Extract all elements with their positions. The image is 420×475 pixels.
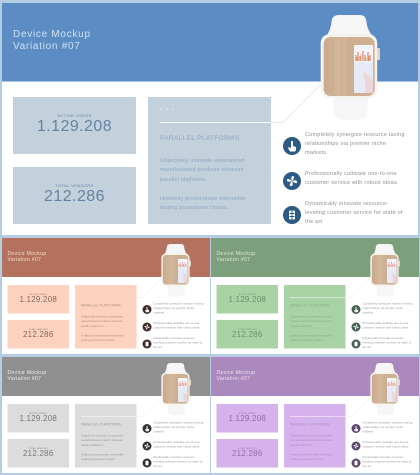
paragraph one	[290, 434, 332, 447]
panel: parallel platforms	[148, 97, 271, 224]
watch mockup with leader line	[136, 363, 191, 417]
paragraph one	[81, 434, 123, 446]
watch mockup with leader line	[136, 244, 191, 298]
text: benefit two: Professionally cultivate one-to-one	[305, 171, 397, 177]
stat: total vendors	[8, 320, 69, 348]
panel: parallel platforms	[284, 404, 345, 467]
paragraph two: testing procedures chains.	[290, 457, 324, 460]
title: Variation #07	[216, 257, 250, 263]
text: benefit three: Dynamically innovate resource-	[305, 201, 388, 207]
paragraph one	[160, 158, 244, 183]
icon: hand	[352, 305, 360, 314]
watch mockup with leader line	[271, 15, 380, 123]
text: benefit two	[305, 171, 399, 186]
icon: hand	[142, 305, 152, 314]
title: Device Mockup	[216, 251, 255, 256]
stat label: ACTIVE USERS	[30, 412, 47, 414]
paragraph one: Objectively innovate empowered	[81, 316, 123, 318]
paragraph two: Holisticly predominate extensible	[81, 453, 124, 456]
stat label: TOTAL VENDORS	[55, 182, 94, 188]
stat value: 212.286	[232, 449, 262, 457]
header band	[210, 238, 418, 277]
stat: active users	[8, 285, 69, 314]
panel heading: PARALLEL PLATFORMS	[290, 304, 329, 308]
title	[8, 251, 46, 263]
text: benefit one: relationships via premier niche	[362, 307, 403, 310]
text: benefit one	[154, 302, 204, 315]
title: Device Mockup	[8, 251, 46, 256]
text: benefit three: Dynamically innovate resource-	[154, 455, 195, 458]
text: benefit one: Completely synergize resource taxing	[154, 302, 203, 305]
text: benefit three: the art.	[154, 346, 163, 349]
stat: active users	[13, 97, 136, 154]
text: benefit two	[154, 322, 200, 330]
paragraph two: testing procedures chains.	[160, 205, 228, 211]
paragraph one: Objectively innovate empowered	[160, 158, 244, 164]
text: benefit three: Dynamically innovate resource-	[362, 337, 404, 340]
paragraph one: manufactured products whereas	[290, 439, 331, 442]
stat value: 212.286	[23, 449, 54, 457]
stat value: 1.129.208	[228, 296, 266, 304]
paragraph one	[81, 316, 123, 328]
header band	[210, 356, 418, 396]
icon: fan	[283, 172, 301, 190]
stat value: 1.129.208	[228, 414, 266, 422]
text: benefit one: relationships via premier niche	[154, 307, 194, 310]
title	[216, 369, 255, 382]
icon: film strip	[142, 458, 152, 468]
paragraph two: Holisticly predominate extensible	[290, 453, 332, 456]
paragraph one: manufactured products whereas	[81, 439, 123, 442]
icon: hand	[283, 137, 301, 155]
title	[216, 251, 255, 263]
paragraph one: manufactured products whereas	[81, 320, 123, 323]
paragraph one: parallel platforms.	[81, 325, 104, 328]
paragraph two	[290, 452, 332, 462]
stat: total vendors	[13, 166, 136, 224]
paragraph one: Objectively innovate empowered	[290, 434, 332, 437]
paragraph two	[160, 196, 246, 211]
header band	[2, 3, 418, 81]
panel heading: PARALLEL PLATFORMS	[81, 304, 121, 308]
paragraph two: Holisticly predominate extensible	[290, 334, 332, 337]
text: benefit two: customer service with robust ideas.	[154, 445, 200, 448]
panel heading: PARALLEL PLATFORMS	[81, 422, 121, 426]
stat label: ACTIVE USERS	[57, 113, 92, 118]
stat value: 212.286	[232, 330, 262, 339]
stat value: 212.286	[44, 188, 105, 204]
text: benefit three: Dynamically innovate resource-	[362, 455, 404, 458]
panel heading: PARALLEL PLATFORMS	[290, 422, 329, 426]
stat value: 1.129.208	[19, 414, 57, 422]
stat: total vendors	[8, 438, 69, 467]
paragraph two: testing procedures chains.	[290, 339, 324, 342]
paragraph one: parallel platforms.	[290, 325, 313, 328]
text: benefit one: markets.	[305, 150, 328, 156]
text: benefit three	[362, 337, 412, 349]
text: benefit one: markets.	[154, 430, 165, 433]
stat label: ACTIVE USERS	[238, 412, 255, 414]
icon: hand	[142, 424, 152, 433]
paragraph two: Holisticly predominate extensible	[160, 196, 245, 202]
text: benefit three	[362, 455, 411, 469]
text: benefit one: relationships via premier niche	[362, 425, 403, 428]
paragraph two: testing procedures chains.	[81, 457, 115, 460]
text: benefit three	[154, 337, 202, 349]
text: benefit one: markets.	[362, 430, 373, 433]
watch mockup with leader line	[210, 356, 418, 472]
stat: total vendors	[216, 320, 278, 348]
header band	[2, 356, 210, 396]
watch mockup with leader line	[346, 244, 400, 298]
text: benefit one	[362, 420, 412, 434]
text: benefit three: the art.	[362, 346, 371, 349]
text: benefit two: Professionally cultivate one-to-one	[154, 440, 199, 443]
slide: main blue variation	[2, 3, 418, 235]
stat value: 1.129.208	[19, 296, 57, 304]
text: benefit three: leveling customer service for state of	[362, 341, 411, 344]
stat label: ACTIVE USERS	[238, 293, 255, 296]
text: benefit one: Completely synergize resource taxing	[362, 302, 412, 305]
icon: fan	[352, 322, 360, 332]
stat value: 1.129.208	[37, 118, 112, 135]
paragraph one: parallel platforms.	[160, 177, 206, 183]
paragraph one: Objectively innovate empowered	[290, 316, 332, 318]
paragraph one: manufactured products whereas	[290, 320, 331, 323]
text: benefit two: customer service with robust ideas.	[362, 445, 409, 448]
slide: red variation	[2, 238, 210, 354]
stat: active users	[216, 404, 278, 432]
text: benefit three: leveling customer service for state of	[362, 460, 411, 463]
stat label: TOTAL VENDORS	[29, 328, 48, 330]
text: benefit three: the art.	[362, 465, 371, 468]
text: benefit three: the art.	[154, 465, 163, 468]
text: benefit three: leveling customer service for state of	[305, 210, 403, 216]
paragraph two	[81, 453, 124, 460]
icon: fan	[351, 441, 360, 450]
text: benefit one: relationships via premier niche	[154, 425, 194, 428]
stat label: TOTAL VENDORS	[237, 446, 256, 449]
stat label: TOTAL VENDORS	[29, 446, 48, 449]
panel: parallel platforms	[75, 404, 136, 467]
title: Variation #07	[8, 376, 41, 381]
panel: parallel platforms	[75, 285, 136, 348]
paragraph one	[290, 316, 332, 328]
icon: fan	[142, 322, 152, 332]
text: benefit three: the art.	[305, 219, 324, 225]
text: benefit three: Dynamically innovate resource-	[154, 337, 195, 340]
stat label: ACTIVE USERS	[30, 293, 47, 296]
text: benefit two	[154, 440, 200, 448]
title	[13, 29, 91, 52]
header band	[2, 238, 210, 277]
text: benefit one	[362, 302, 412, 315]
icon: film strip	[351, 458, 360, 467]
text: benefit one: Completely synergize resource taxing	[154, 421, 203, 424]
text: benefit one	[154, 421, 204, 433]
paragraph two	[81, 334, 124, 342]
stat: active users	[8, 404, 69, 432]
text: benefit one: markets.	[362, 312, 373, 315]
text: benefit two: Professionally cultivate one-to-one	[154, 322, 199, 325]
text: benefit one: Completely synergize resource taxing	[362, 421, 412, 424]
text: benefit two: customer service with robust ideas.	[305, 180, 399, 186]
title: Device Mockup	[13, 29, 91, 40]
stat value: 212.286	[23, 330, 54, 339]
dots: •••	[160, 106, 179, 111]
text: benefit one	[305, 132, 405, 156]
text: benefit two: customer service with robust ideas.	[154, 327, 200, 330]
text: benefit two: Professionally cultivate one-to-one	[362, 440, 408, 443]
stat: active users	[216, 285, 278, 314]
panel: parallel platforms	[284, 285, 345, 348]
panel heading: PARALLEL PLATFORMS	[160, 135, 240, 142]
icon: hand	[351, 424, 360, 432]
text: benefit two	[362, 322, 409, 330]
title: Variation #07	[13, 41, 81, 52]
text: benefit two	[362, 440, 409, 449]
text: benefit three: leveling customer service for state of	[154, 341, 202, 344]
text: benefit two: customer service with robust ideas.	[362, 327, 409, 330]
text: benefit one: markets.	[154, 312, 165, 315]
title: Variation #07	[8, 257, 41, 263]
paragraph two: testing procedures chains.	[81, 339, 115, 342]
icon: fan	[142, 442, 152, 450]
paragraph two	[290, 334, 332, 342]
title: Variation #07	[216, 376, 250, 381]
icon: film strip	[283, 206, 301, 224]
slide: purple variation	[210, 356, 418, 472]
text: benefit two: Professionally cultivate one-to-one	[362, 322, 408, 325]
slide: grey variation	[2, 356, 210, 472]
stat label: TOTAL VENDORS	[237, 328, 256, 330]
title: Device Mockup	[8, 369, 46, 375]
paragraph one: parallel platforms.	[81, 443, 104, 446]
icon: film strip	[142, 340, 152, 348]
text: benefit three	[305, 201, 403, 225]
text: benefit one: relationships via premier niche	[305, 141, 386, 147]
slide: green variation	[210, 238, 418, 354]
paragraph one: Objectively innovate empowered	[81, 434, 123, 437]
title: Device Mockup	[216, 369, 255, 375]
title	[8, 369, 46, 381]
text: benefit one: Completely synergize resource taxing	[305, 132, 405, 138]
paragraph one: parallel platforms.	[290, 443, 313, 446]
text: benefit three: leveling customer service for state of	[154, 460, 202, 463]
stat: total vendors	[216, 438, 278, 467]
paragraph two: Holisticly predominate extensible	[81, 334, 124, 337]
icon: film strip	[352, 340, 360, 348]
paragraph one: manufactured products whereas	[160, 167, 243, 173]
text: benefit three	[154, 455, 202, 468]
